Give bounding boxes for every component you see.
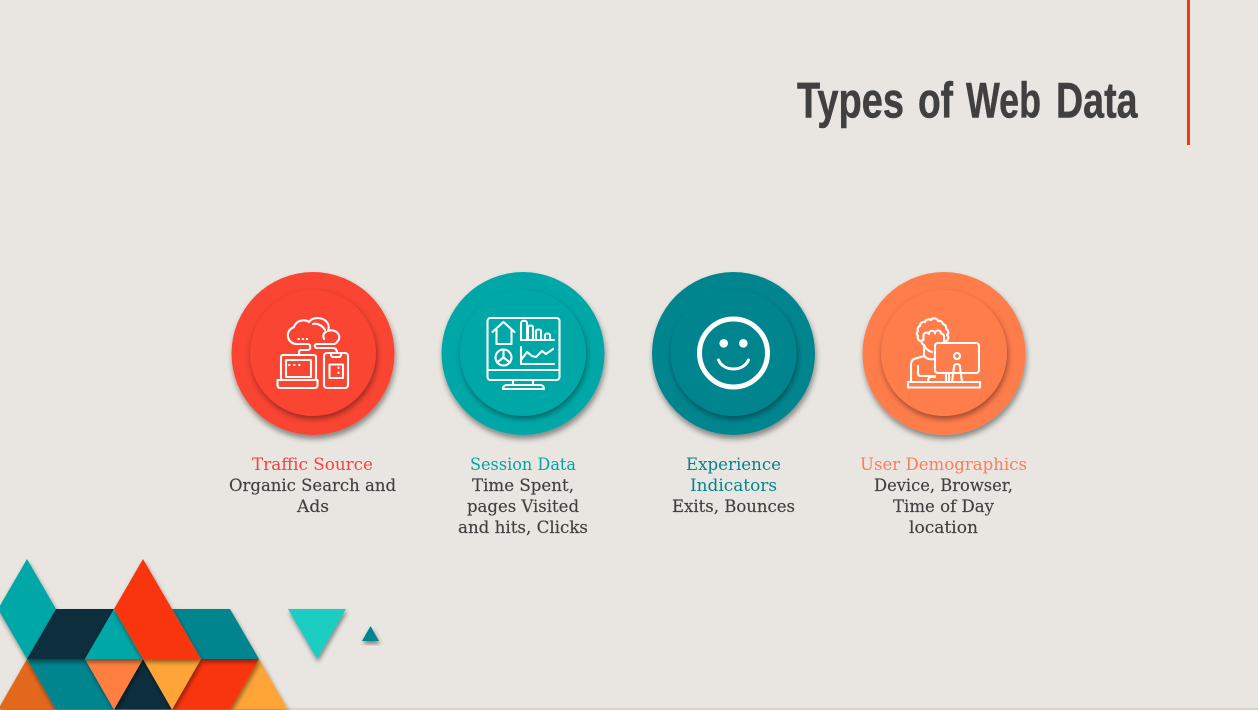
- traffic source item: [229, 272, 396, 516]
- bottom edge line: [0, 708, 1258, 710]
- title: Data: [1056, 72, 1138, 128]
- traffic source label: Organic Search and: [229, 476, 396, 495]
- experience indicators label: Indicators: [690, 476, 777, 495]
- red outer circle: [232, 272, 394, 435]
- user demographics item: [860, 272, 1027, 537]
- experience indicators label: Exits, Bounces: [672, 497, 795, 516]
- traffic source label: [229, 455, 396, 516]
- icon: analytics monitor: [488, 318, 560, 389]
- cyan inverted triangle: [288, 609, 346, 659]
- user demographics label: location: [909, 518, 978, 537]
- session data label: Session Data: [470, 455, 576, 474]
- orange outer circle: [862, 272, 1026, 435]
- small teal triangle: [362, 626, 379, 641]
- title: of: [918, 72, 953, 128]
- session data label: [458, 455, 588, 537]
- user demographics label: User Demographics: [860, 455, 1027, 474]
- title: Types: [797, 72, 904, 128]
- experience indicators label: [672, 455, 795, 516]
- icon: cloud and devices: [278, 318, 348, 388]
- user demographics label: Device, Browser,: [874, 476, 1013, 495]
- session data label: Time Spent,: [472, 476, 574, 495]
- experience indicators item: [652, 272, 815, 516]
- teal outer circle: [442, 272, 604, 435]
- icon: person at computer: [908, 318, 980, 388]
- title: [797, 72, 1138, 128]
- icon: smiley face: [700, 319, 768, 387]
- traffic source label: Traffic Source: [252, 455, 373, 474]
- triangle mosaic: [0, 559, 288, 710]
- title: Web: [966, 72, 1041, 128]
- orange inner circle: [881, 290, 1007, 416]
- dark teal inner circle: [670, 290, 796, 416]
- experience indicators label: Experience: [686, 455, 781, 474]
- session data label: and hits, Clicks: [458, 518, 588, 537]
- user demographics label: Time of Day: [893, 497, 995, 516]
- dark teal outer circle: [652, 272, 815, 435]
- user demographics label: [860, 455, 1027, 537]
- title accent bar: [1187, 0, 1190, 145]
- session data label: pages Visited: [467, 497, 579, 516]
- teal inner circle: [460, 290, 586, 416]
- session data item: [442, 272, 604, 537]
- red inner circle: [250, 290, 376, 416]
- traffic source label: Ads: [296, 497, 329, 516]
